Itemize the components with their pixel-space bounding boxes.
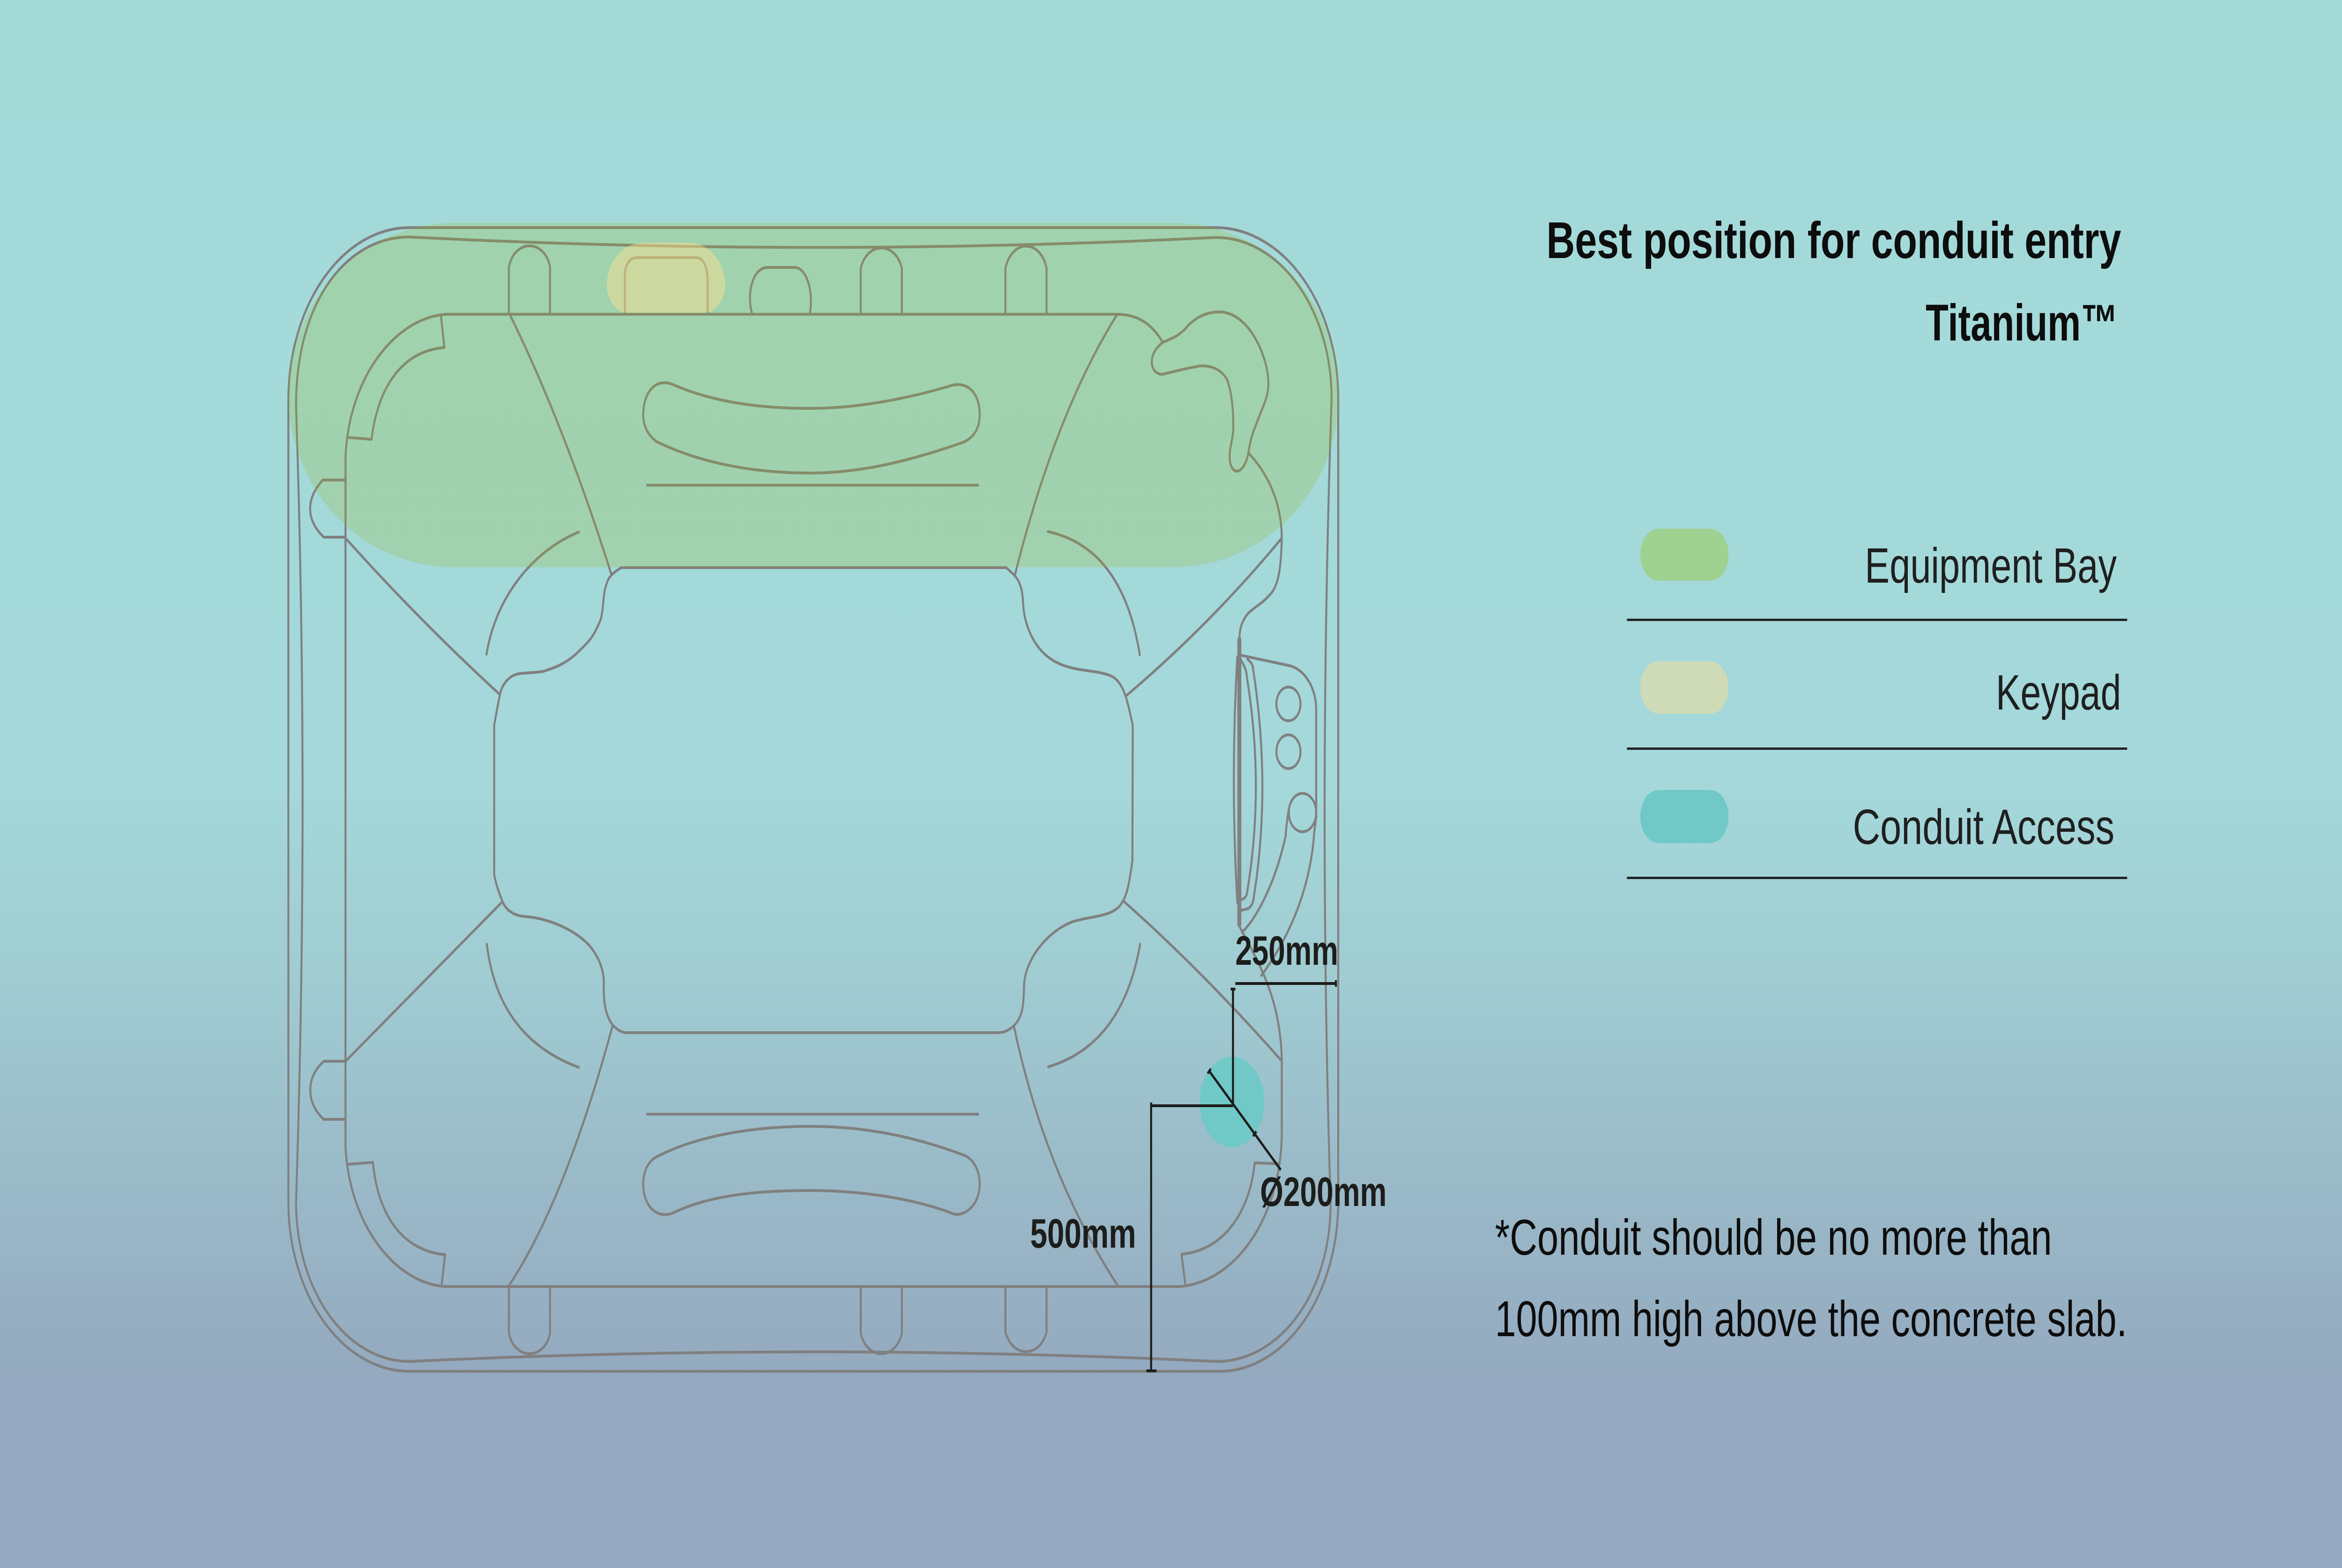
legend row: keypad bbox=[1627, 661, 2127, 750]
right tub wall upper bbox=[1239, 453, 1282, 924]
tub wall bbox=[346, 314, 1282, 1287]
bottom pillow tabs bbox=[509, 1287, 1046, 1354]
dimension lines bbox=[1147, 980, 1336, 1371]
label: diameter 200mm: Ø200mm bbox=[1260, 1169, 1386, 1215]
seat dividers bbox=[346, 315, 1282, 1286]
keypad zone bbox=[607, 243, 725, 313]
legend row: equipment bay: Equipment Bay bbox=[1865, 538, 2117, 593]
corner headrests bbox=[347, 317, 1279, 1284]
title: Best position for conduit entry bbox=[1546, 212, 2121, 269]
bottom lounger bar bbox=[647, 1113, 978, 1116]
seat arcs bbox=[487, 532, 1140, 1067]
top lounger bar bbox=[647, 484, 978, 487]
footnote: *Conduit should be no more than bbox=[1495, 1209, 2052, 1265]
inner rim bbox=[296, 237, 1332, 1361]
footnote: 100mm high above the concrete slab. bbox=[1495, 1290, 2127, 1347]
500mm dimension bbox=[1147, 1102, 1233, 1371]
legend row: conduit access: Conduit Access bbox=[1853, 799, 2114, 855]
label: 500mm: 500mm bbox=[1030, 1211, 1136, 1257]
footnote bbox=[1495, 1209, 2127, 1347]
central foot well bbox=[494, 568, 1133, 1033]
title: Titanium™ bbox=[1926, 295, 2118, 352]
equipment bay zone bbox=[289, 223, 1339, 567]
250mm dimension bbox=[1230, 980, 1336, 1106]
bottom lounger bbox=[643, 1126, 980, 1214]
label: 250mm: 250mm bbox=[1235, 928, 1338, 974]
corner lounger nodule bbox=[1152, 312, 1268, 471]
top lounger bbox=[643, 383, 980, 473]
title bbox=[1546, 212, 2121, 352]
top pillow tabs bbox=[509, 246, 1046, 314]
legend row: keypad: Keypad bbox=[1996, 665, 2121, 720]
side tabs bbox=[310, 480, 346, 1119]
legend row: equipment bay bbox=[1627, 529, 2127, 621]
hot tub plan outline bbox=[289, 228, 1338, 1371]
conduit access circle bbox=[1200, 1057, 1264, 1147]
side control console bbox=[1234, 640, 1316, 976]
legend bbox=[1627, 529, 2127, 879]
outer shell bbox=[289, 228, 1338, 1371]
legend row: conduit access bbox=[1627, 790, 2127, 879]
diameter dimension bbox=[1208, 1069, 1281, 1170]
